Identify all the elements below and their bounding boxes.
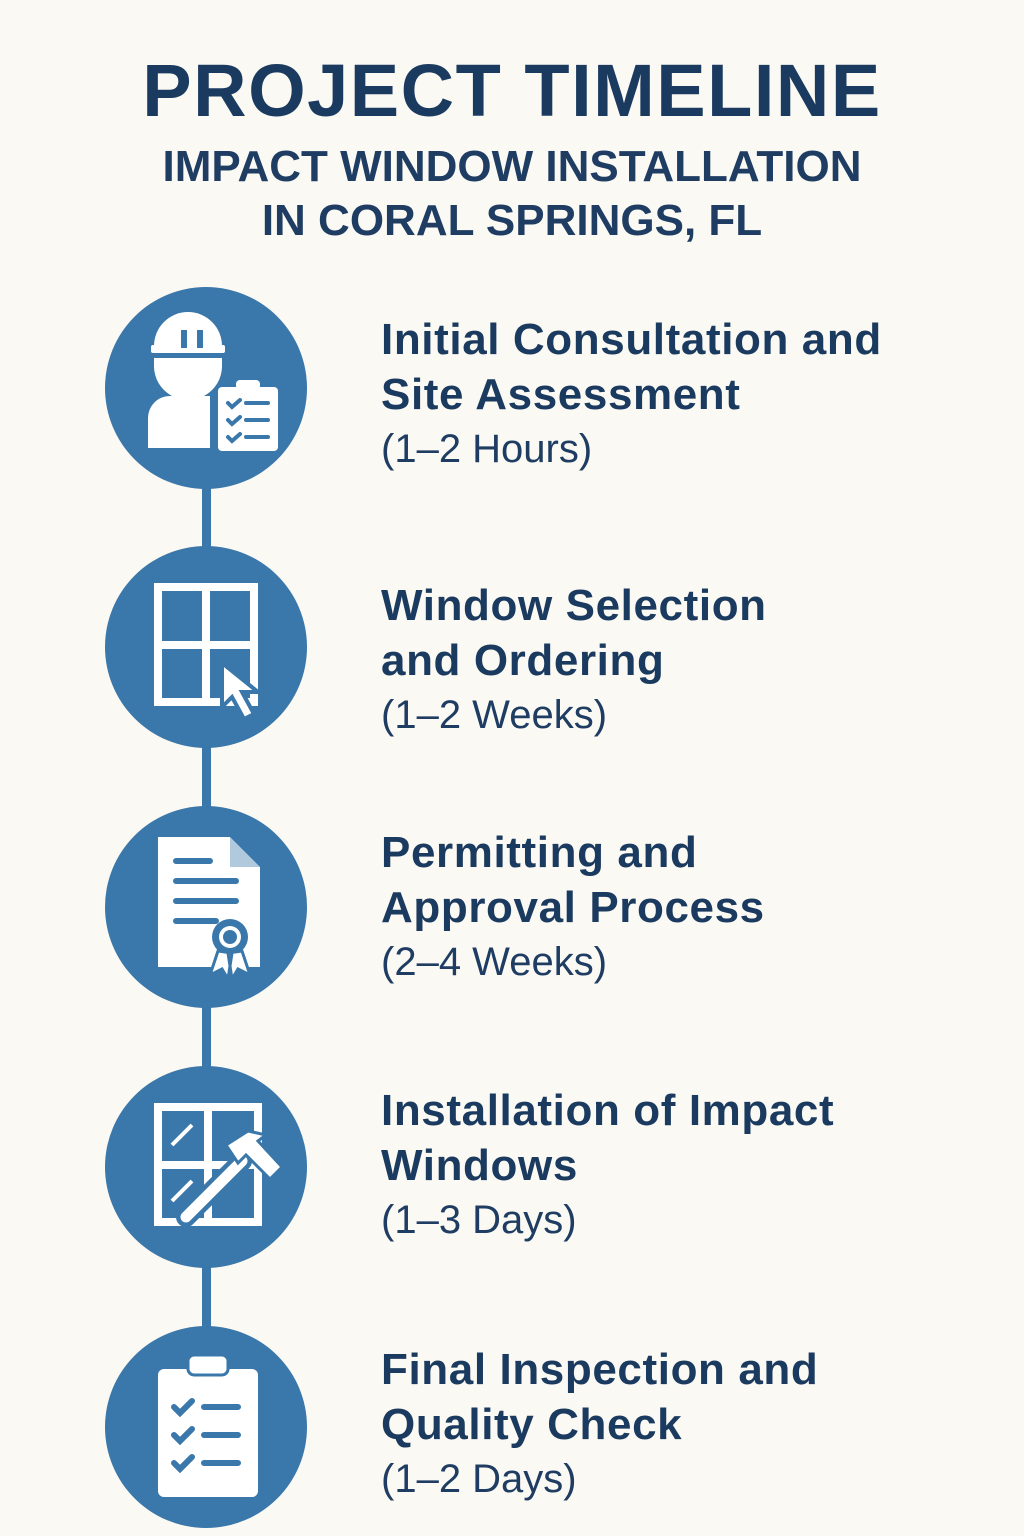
icon: window with cursor xyxy=(105,546,307,748)
step 3 text xyxy=(381,828,765,984)
step 1 text: Initial Consultation and xyxy=(381,315,882,364)
icon: document with certificate xyxy=(105,806,307,1008)
title: PROJECT TIMELINE xyxy=(142,49,882,132)
step 1 text: (1–2 Hours) xyxy=(381,427,592,471)
icon: worker with clipboard xyxy=(105,287,307,489)
connector line xyxy=(202,388,211,1428)
step 5 text: (1–2 Days) xyxy=(381,1457,577,1501)
step 4 text: Windows xyxy=(381,1141,578,1190)
step 3 text: (2–4 Weeks) xyxy=(381,940,607,984)
icon: window with hammer xyxy=(105,1066,307,1268)
step 2 text: (1–2 Weeks) xyxy=(381,693,607,737)
step 3 text: Approval Process xyxy=(381,883,765,932)
step 2 text: Window Selection xyxy=(381,581,767,630)
step 2 text xyxy=(381,581,767,737)
subtitle xyxy=(162,142,862,245)
step 4 text: (1–3 Days) xyxy=(381,1198,577,1242)
step 1 text xyxy=(381,315,882,471)
step 2 text: and Ordering xyxy=(381,636,664,685)
step 5 text: Final Inspection and xyxy=(381,1345,818,1394)
step 5 text: Quality Check xyxy=(381,1400,682,1449)
subtitle: IMPACT WINDOW INSTALLATION xyxy=(162,142,862,191)
step 3 text: Permitting and xyxy=(381,828,697,877)
step 4 text xyxy=(381,1086,834,1242)
icon: checklist clipboard xyxy=(105,1326,307,1528)
step 5 text xyxy=(381,1345,818,1501)
step 1 text: Site Assessment xyxy=(381,370,741,419)
subtitle: IN CORAL SPRINGS, FL xyxy=(262,196,762,245)
step 4 text: Installation of Impact xyxy=(381,1086,834,1135)
